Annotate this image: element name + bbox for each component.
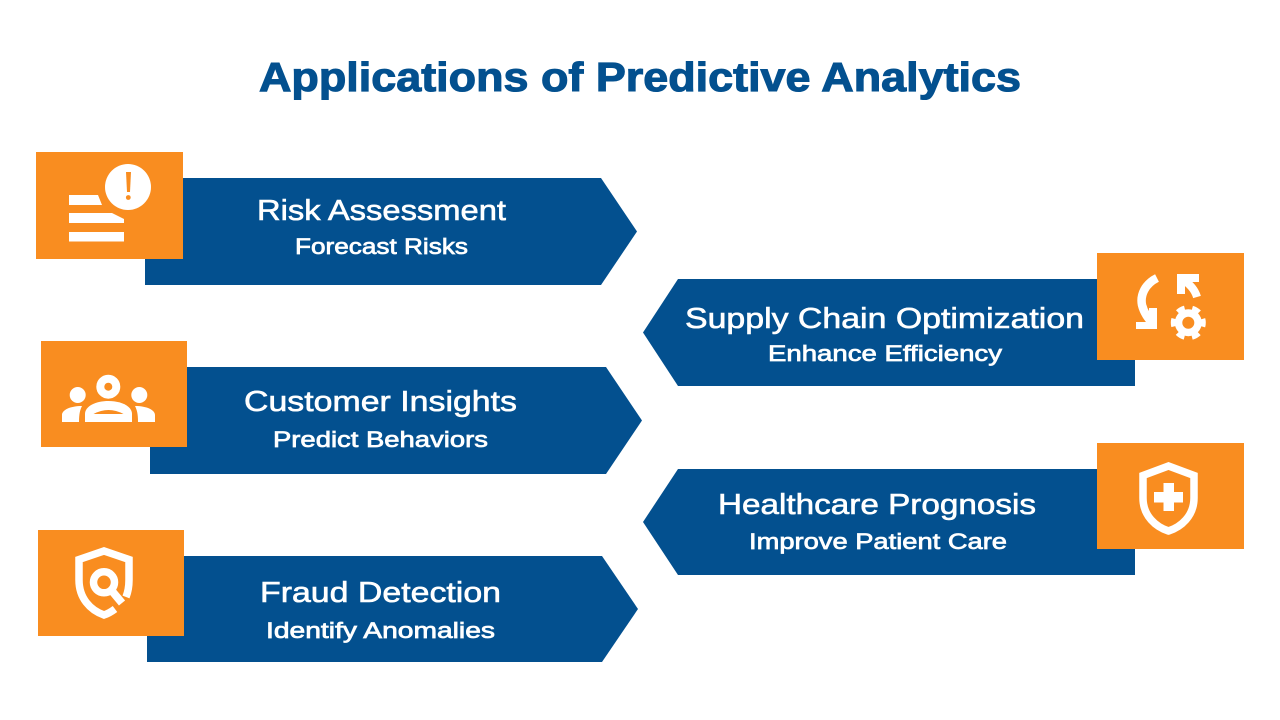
arrow: fraud detection: [147, 556, 638, 662]
heading: customer insights: Customer Insights: [244, 386, 517, 418]
title: Applications of Predictive Analytics: [259, 54, 1021, 100]
arrow: healthcare prognosis: [643, 469, 1135, 575]
icon box: customer insights: [41, 341, 187, 447]
icon box: healthcare prognosis: [1097, 443, 1244, 549]
panel: customer insights: [41, 341, 642, 474]
text: forecast risks: Forecast Risks: [295, 234, 468, 259]
arrow: risk assessment: [145, 178, 637, 285]
icon box: risk assessment: [36, 152, 183, 259]
panel: supply chain optimization: [643, 253, 1244, 386]
text: predict behaviors: Predict Behaviors: [273, 427, 488, 452]
text: identify anomalies: Identify Anomalies: [266, 618, 495, 643]
panel: healthcare prognosis: [643, 443, 1244, 575]
icon box: fraud detection: [38, 530, 184, 636]
icon: shield with medical cross: [1143, 466, 1194, 531]
arrow: customer insights: [150, 367, 642, 474]
panel: risk assessment: [36, 152, 637, 285]
icon: cycle arrows and gear: [1136, 274, 1207, 341]
panel: fraud detection: [38, 530, 638, 662]
icon: people group: [62, 379, 155, 422]
icon: shield with magnifier: [79, 551, 129, 615]
heading: healthcare prognosis: Healthcare Prognosis: [718, 489, 1036, 521]
heading: risk assessment: Risk Assessment: [257, 195, 506, 227]
text: enhance efficiency: Enhance Efficiency: [768, 341, 1002, 366]
heading: supply chain optimization: Supply Chain Optimization: [685, 303, 1084, 335]
text: improve patient care: Improve Patient Care: [749, 529, 1007, 554]
icon box: supply chain optimization: [1097, 253, 1244, 360]
icon: risk alert: [69, 164, 151, 242]
heading: fraud detection: Fraud Detection: [260, 577, 501, 609]
arrow: supply chain optimization: [643, 279, 1135, 386]
